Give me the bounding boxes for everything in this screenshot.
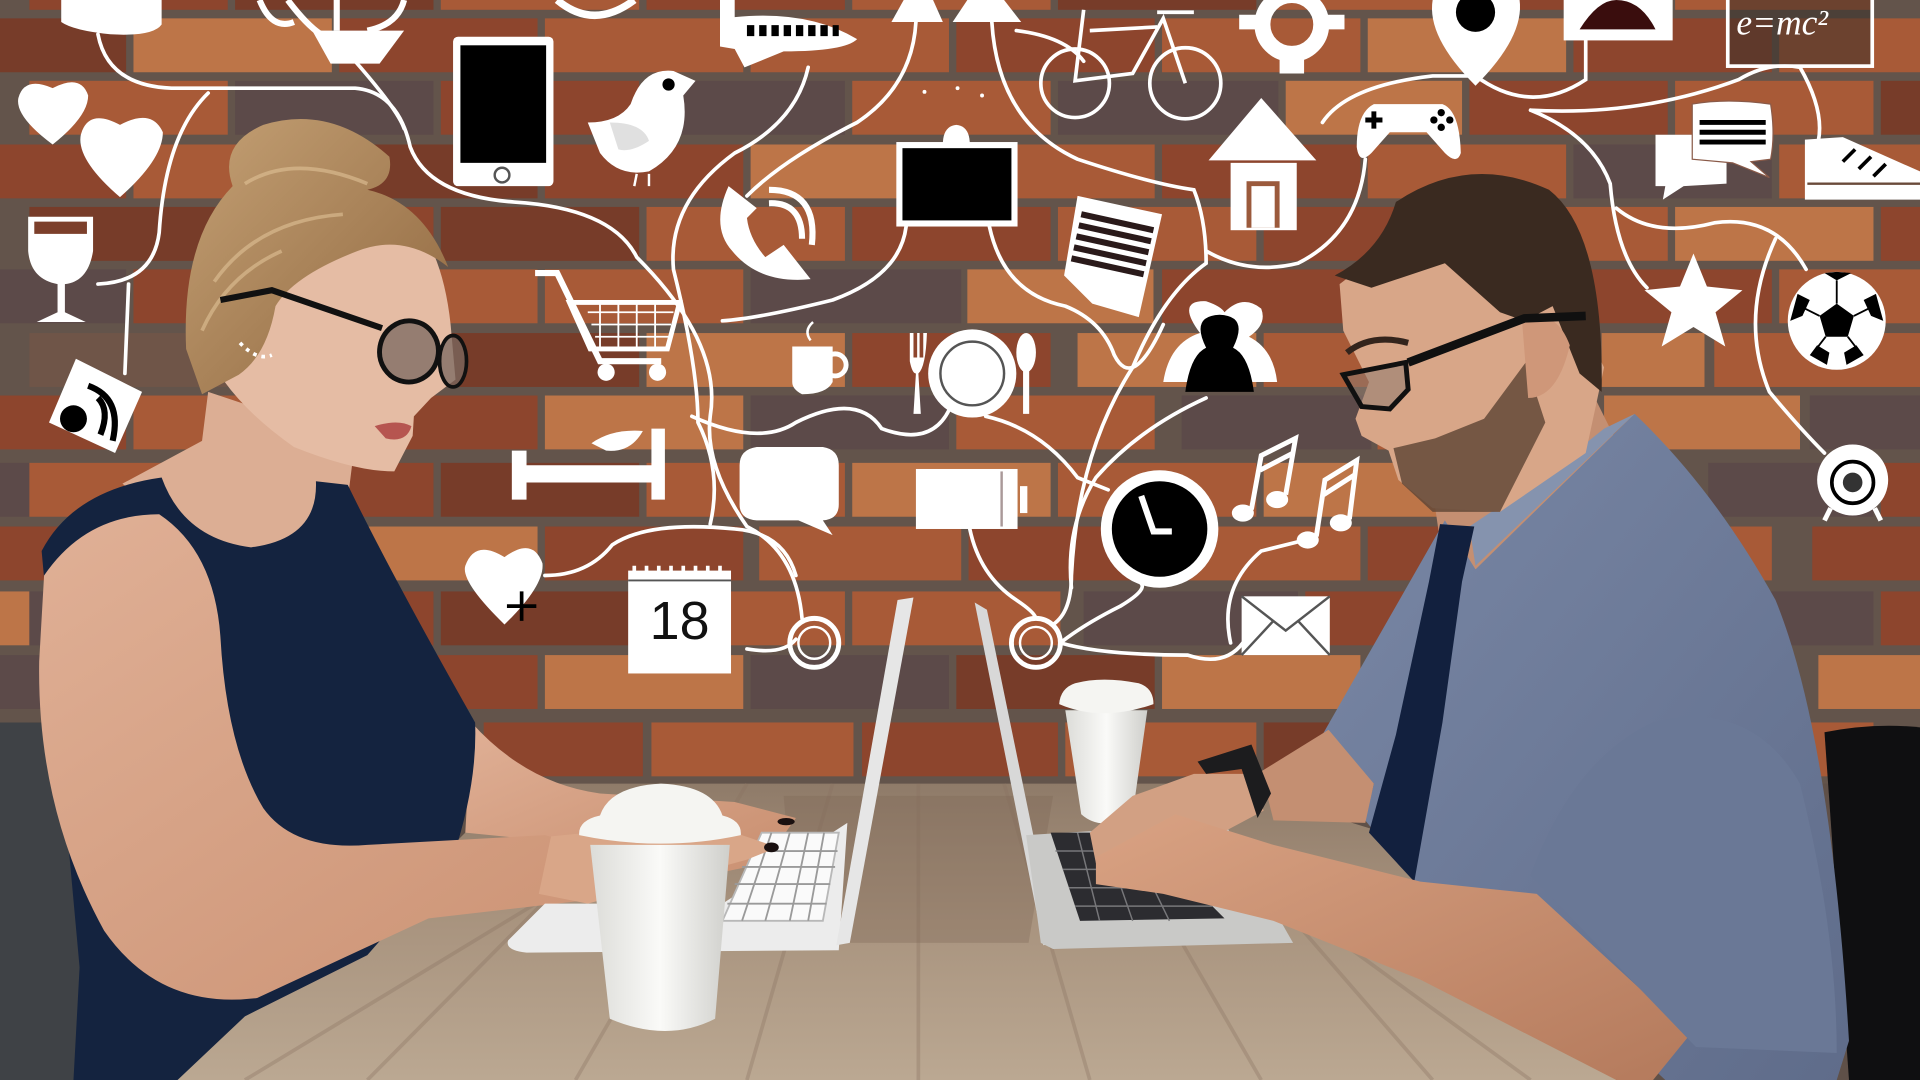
icon: speaker <box>49 359 142 453</box>
icon: calendar <box>628 566 731 673</box>
man: collar <box>1469 414 1635 566</box>
icon: music notes <box>1232 438 1357 549</box>
left laptop base <box>508 823 847 953</box>
small paper cup <box>1059 680 1153 823</box>
man: rolled sleeve <box>1531 717 1837 1053</box>
man: glasses <box>1343 316 1586 409</box>
icon: bell right <box>953 0 1021 22</box>
large paper cup <box>579 784 741 1031</box>
icon: sneaker <box>1805 137 1920 200</box>
icon: shopping cart <box>535 273 680 381</box>
icon: battery <box>916 469 1027 529</box>
icon: bed <box>512 429 665 500</box>
man: beard <box>1393 362 1545 512</box>
left chair <box>0 722 108 1080</box>
man: ear <box>1522 317 1570 398</box>
man: far hand <box>1090 774 1264 863</box>
icon: people <box>1163 301 1277 392</box>
icon: calendar: 18 <box>650 591 710 651</box>
left laptop keyboard <box>722 833 839 921</box>
right laptop screen <box>975 602 1056 945</box>
woman: earring <box>240 343 272 357</box>
icon: target <box>1817 444 1888 520</box>
icon: phone <box>720 186 813 280</box>
icon: newspaper <box>1064 196 1162 317</box>
icon: left ring <box>790 618 839 667</box>
man: far forearm <box>1261 730 1374 823</box>
icon: soccer ball <box>1788 272 1886 370</box>
man: face <box>1340 248 1604 512</box>
woman: head <box>208 188 456 471</box>
man: hair <box>1335 174 1602 392</box>
left laptop <box>508 598 913 953</box>
icon: speech bubble <box>740 447 839 535</box>
woman: far arm <box>465 722 796 863</box>
icon: top circle <box>557 0 634 15</box>
icon: formula board: e=mc² <box>1736 2 1829 42</box>
right laptop keyboard <box>1051 833 1224 921</box>
icon: tablet <box>453 37 553 186</box>
woman: dress <box>42 478 475 1080</box>
icon: coffee cup <box>792 322 846 394</box>
icon: bell left <box>891 0 943 22</box>
woman: hair <box>186 119 448 394</box>
icon: plant basket <box>260 0 404 64</box>
man: shirt <box>1322 414 1849 1080</box>
icon: top box <box>1564 0 1673 40</box>
icon: house <box>1209 98 1316 230</box>
woman: glasses <box>220 290 467 387</box>
icon: right ring <box>1011 618 1060 667</box>
icon: chat bubbles <box>1656 101 1773 200</box>
icon: gear <box>1239 0 1344 73</box>
man: watch <box>1198 744 1271 818</box>
woman: neck and chest <box>122 392 367 576</box>
icon: television <box>896 125 1018 227</box>
woman: lips <box>375 422 411 439</box>
right laptop <box>975 602 1293 949</box>
icon: heart large <box>80 118 163 197</box>
icon: heart with plus <box>465 548 543 624</box>
brick wall <box>0 0 1920 784</box>
icon: heart small <box>18 82 88 144</box>
man <box>1090 174 1849 1080</box>
table <box>165 784 1616 1080</box>
woman <box>39 119 796 1080</box>
icon: star <box>1644 253 1742 347</box>
left laptop screen <box>836 598 913 945</box>
icon: clock <box>1101 470 1218 588</box>
icon: plate and cutlery <box>910 329 1036 418</box>
man: neck <box>1433 392 1616 576</box>
icon: bird <box>588 71 696 186</box>
right laptop base <box>1026 823 1293 949</box>
icon: wine glass <box>28 217 93 322</box>
icon: envelope <box>1242 596 1330 655</box>
connector lines <box>98 22 1824 659</box>
man: tie <box>1369 524 1474 882</box>
woman: near arm <box>39 514 765 1000</box>
man: brow <box>1347 340 1408 353</box>
woman's front hand <box>539 818 795 904</box>
icon: train <box>720 0 857 67</box>
icon: formula board <box>1728 0 1872 66</box>
icon: bicycle <box>1041 10 1221 119</box>
icon: map pin <box>1432 0 1520 86</box>
man: near arm <box>1096 814 1690 1080</box>
icon: dots <box>923 86 984 97</box>
right chair <box>1824 726 1920 1080</box>
icon: game controller <box>1357 104 1461 159</box>
icon: top hand <box>61 0 162 35</box>
